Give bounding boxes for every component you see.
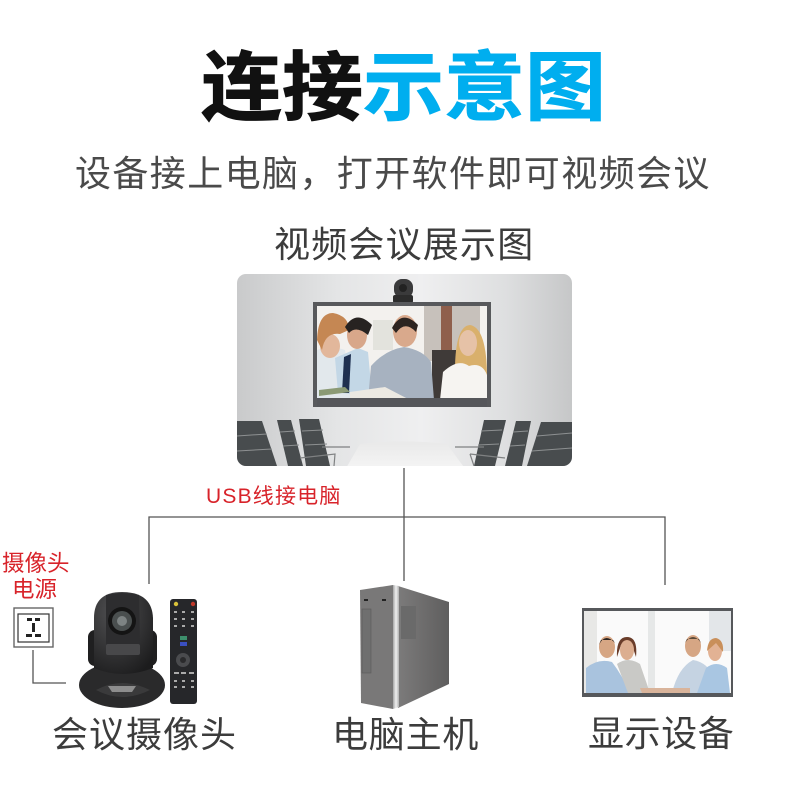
person left xyxy=(317,348,350,398)
icon: display with group photo xyxy=(582,608,733,697)
label: camera power: 摄像头 xyxy=(2,551,70,576)
person 2 xyxy=(335,348,372,395)
heading: video conference display: 视频会议展示图 xyxy=(274,224,534,265)
icon: power socket xyxy=(14,608,53,647)
connection lines xyxy=(33,468,665,683)
subtitle: 设备接上电脑，打开软件即可视频会议 xyxy=(75,153,711,194)
people xyxy=(586,661,630,693)
chairs right xyxy=(474,420,572,466)
chairs left xyxy=(237,419,330,466)
label: display device: 显示设备 xyxy=(588,713,734,754)
person right xyxy=(455,325,487,378)
conference table xyxy=(348,454,463,466)
title: 连接示意图 xyxy=(201,46,606,130)
label: computer host: 电脑主机 xyxy=(332,714,479,755)
icon: computer tower xyxy=(360,585,449,709)
label: camera power xyxy=(2,551,70,602)
table items xyxy=(319,387,350,396)
photo: meeting room with display xyxy=(237,274,572,470)
icon: remote control xyxy=(170,599,197,704)
wall display xyxy=(313,302,491,407)
label: camera power: 电源 xyxy=(12,577,57,602)
label: USB: USB线接电脑 xyxy=(206,485,342,508)
icon: PTZ conference camera xyxy=(79,592,165,708)
person center xyxy=(368,347,434,400)
label: conference camera: 会议摄像头 xyxy=(52,714,237,755)
icon: camera on top of display xyxy=(393,279,413,303)
